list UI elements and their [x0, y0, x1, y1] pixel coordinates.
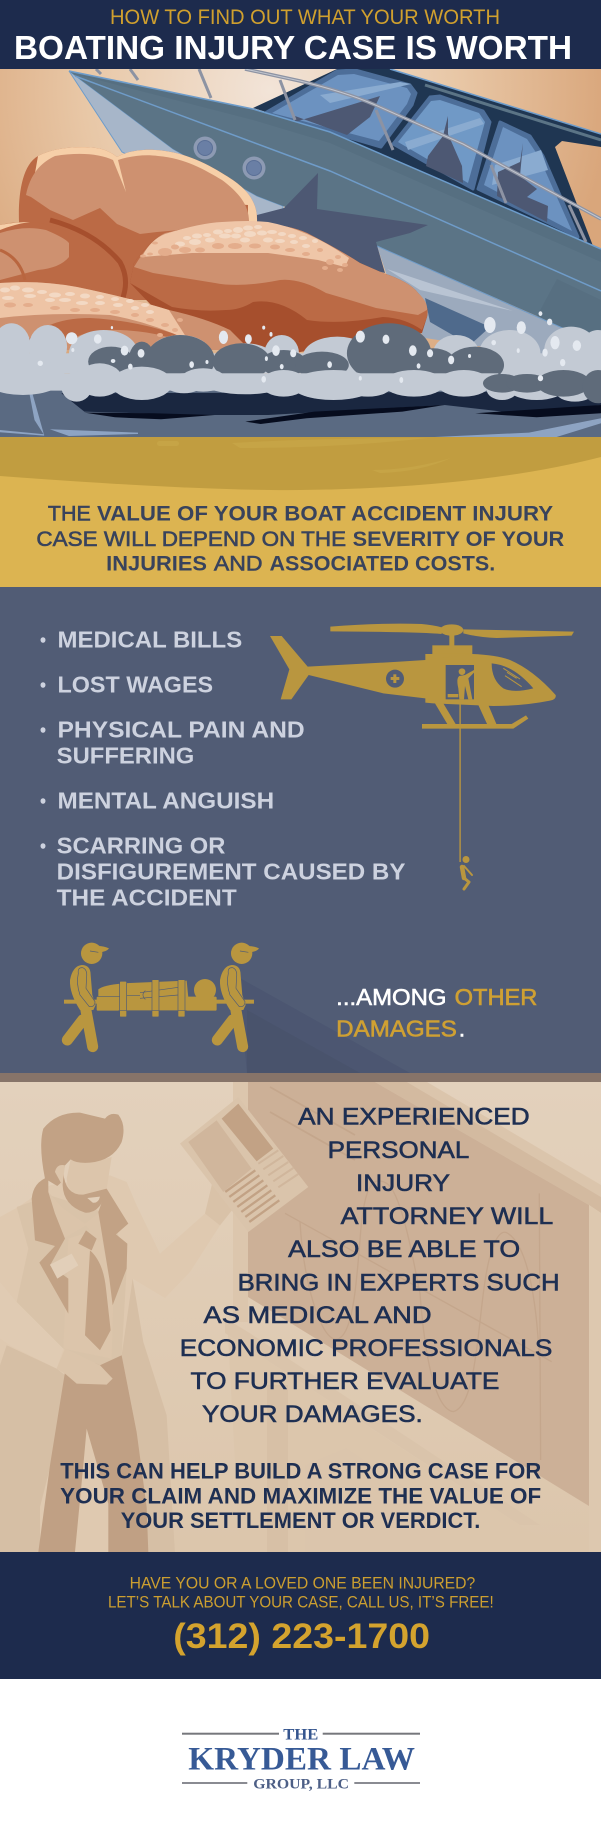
boat railing — [96, 69, 601, 242]
attorney body text: PERSONAL — [328, 1137, 469, 1164]
attorney hands and arm — [0, 1282, 63, 1369]
attorney body text: ECONOMIC PROFESSIONALS — [180, 1335, 552, 1362]
among other damages text: OTHER — [455, 984, 537, 1010]
attorney body text: ATTORNEY WILL — [341, 1203, 553, 1230]
among other damages text: DAMAGES — [336, 1016, 457, 1042]
attorney head and beard — [67, 1157, 112, 1195]
logo: KRYDER LAW — [188, 1741, 415, 1777]
header subtitle: HOW TO FIND OUT WHAT YOUR WORTH — [110, 6, 500, 29]
pebbles on front rock — [140, 225, 348, 272]
logo: THE — [283, 1726, 318, 1743]
damages bullet list: SCARRING OR — [57, 832, 226, 858]
boat lower hull and keel — [69, 71, 601, 365]
header — [0, 0, 601, 69]
front right rock — [130, 221, 428, 357]
icon: rescue helicopter — [270, 624, 574, 729]
helicopter medical cross — [386, 670, 404, 688]
attorney conclusion text — [60, 1458, 541, 1533]
among other damages text — [336, 984, 537, 1042]
rear rock — [19, 147, 257, 300]
attorney tie — [78, 1230, 111, 1350]
header title: BOATING INJURY CASE IS WORTH — [14, 30, 572, 67]
paramedic left — [67, 943, 109, 1047]
attorney lapels — [32, 1177, 68, 1314]
intro text: INJURIES — [106, 552, 207, 576]
logo — [182, 1726, 420, 1792]
pebbles on bottom left rock — [0, 286, 183, 337]
damages bullet list: MENTAL ANGUISH — [58, 787, 274, 813]
phone number: (312) 223-1700 — [173, 1617, 430, 1656]
boat cabin frame — [253, 69, 601, 246]
damages bullet list: PHYSICAL PAIN AND — [58, 717, 305, 743]
call to action — [0, 1552, 601, 1679]
icon: paramedics carrying stretcher — [64, 943, 259, 1047]
panel: damages — [0, 587, 601, 1073]
attorney body text: AN EXPERIENCED — [298, 1104, 530, 1131]
damages bullet list: MEDICAL BILLS — [58, 626, 242, 652]
attorney vest and shirt — [17, 1195, 127, 1365]
intro text: ASSOCIATED COSTS. — [270, 552, 495, 576]
attorney body text: BRING IN EXPERTS SUCH — [238, 1269, 560, 1296]
attorney conclusion text: YOUR SETTLEMENT OR VERDICT. — [121, 1508, 480, 1533]
boat hull — [69, 71, 601, 345]
damages bullet list: LOST WAGES — [58, 671, 213, 697]
illustration: attorney reading document — [0, 1097, 308, 1552]
damages bullet list: THE ACCIDENT — [57, 884, 237, 910]
among other damages text: . — [459, 1016, 465, 1042]
intro text: VALUE OF YOUR BOAT ACCIDENT INJURY — [97, 502, 553, 526]
call to action text — [108, 1573, 494, 1612]
attorney body text: AS MEDICAL AND — [204, 1302, 432, 1329]
helicopter door with rescuer — [446, 665, 474, 699]
paramedic right — [217, 943, 259, 1047]
illustration: boat crashed on rocks — [0, 69, 601, 437]
call to action text: HAVE YOU OR A LOVED ONE BEEN INJURED? — [130, 1573, 475, 1592]
damages bullet list: DISFIGUREMENT CAUSED BY — [57, 858, 405, 884]
water and foam — [0, 311, 601, 437]
bottom left rock — [0, 282, 250, 350]
document held by attorney — [180, 1097, 308, 1232]
panel: attorney — [0, 1082, 601, 1552]
damages bullet list: SUFFERING — [57, 742, 194, 768]
rescue rope — [459, 703, 461, 862]
intro text: SEVERITY OF YOUR — [353, 527, 565, 551]
intro text: CASE WILL DEPEND ON THE — [36, 527, 346, 551]
attorney trousers — [38, 1355, 148, 1552]
intro text — [36, 502, 565, 576]
background office scene — [225, 1082, 601, 1552]
portholes — [194, 136, 266, 180]
attorney body text: YOUR DAMAGES. — [202, 1401, 423, 1428]
attorney body text: ALSO BE ABLE TO — [288, 1236, 520, 1263]
attorney conclusion text: THIS CAN HELP BUILD A STRONG CASE FOR — [60, 1458, 541, 1484]
panel: sand intro — [0, 437, 601, 587]
helicopter window — [492, 663, 533, 691]
attorney body text: TO FURTHER EVALUATE — [190, 1368, 499, 1395]
logo: GROUP, LLC — [253, 1776, 349, 1792]
attorney conclusion text: YOUR CLAIM AND MAXIMIZE THE VALUE OF — [60, 1483, 541, 1508]
divider strip — [0, 1073, 601, 1082]
icon: rescued person on rope — [462, 856, 472, 889]
among other damages text: ...AMONG — [336, 984, 446, 1010]
stretcher patient — [97, 979, 217, 1017]
intro text: THE — [48, 502, 91, 526]
attorney body text — [180, 1104, 560, 1428]
intro text: AND — [214, 552, 263, 576]
attorney body text: INJURY — [356, 1170, 450, 1197]
damages bullet list — [40, 626, 406, 910]
left rock — [0, 220, 126, 300]
call to action text: LET’S TALK ABOUT YOUR CASE, CALL US, IT’S FREE! — [108, 1593, 494, 1612]
